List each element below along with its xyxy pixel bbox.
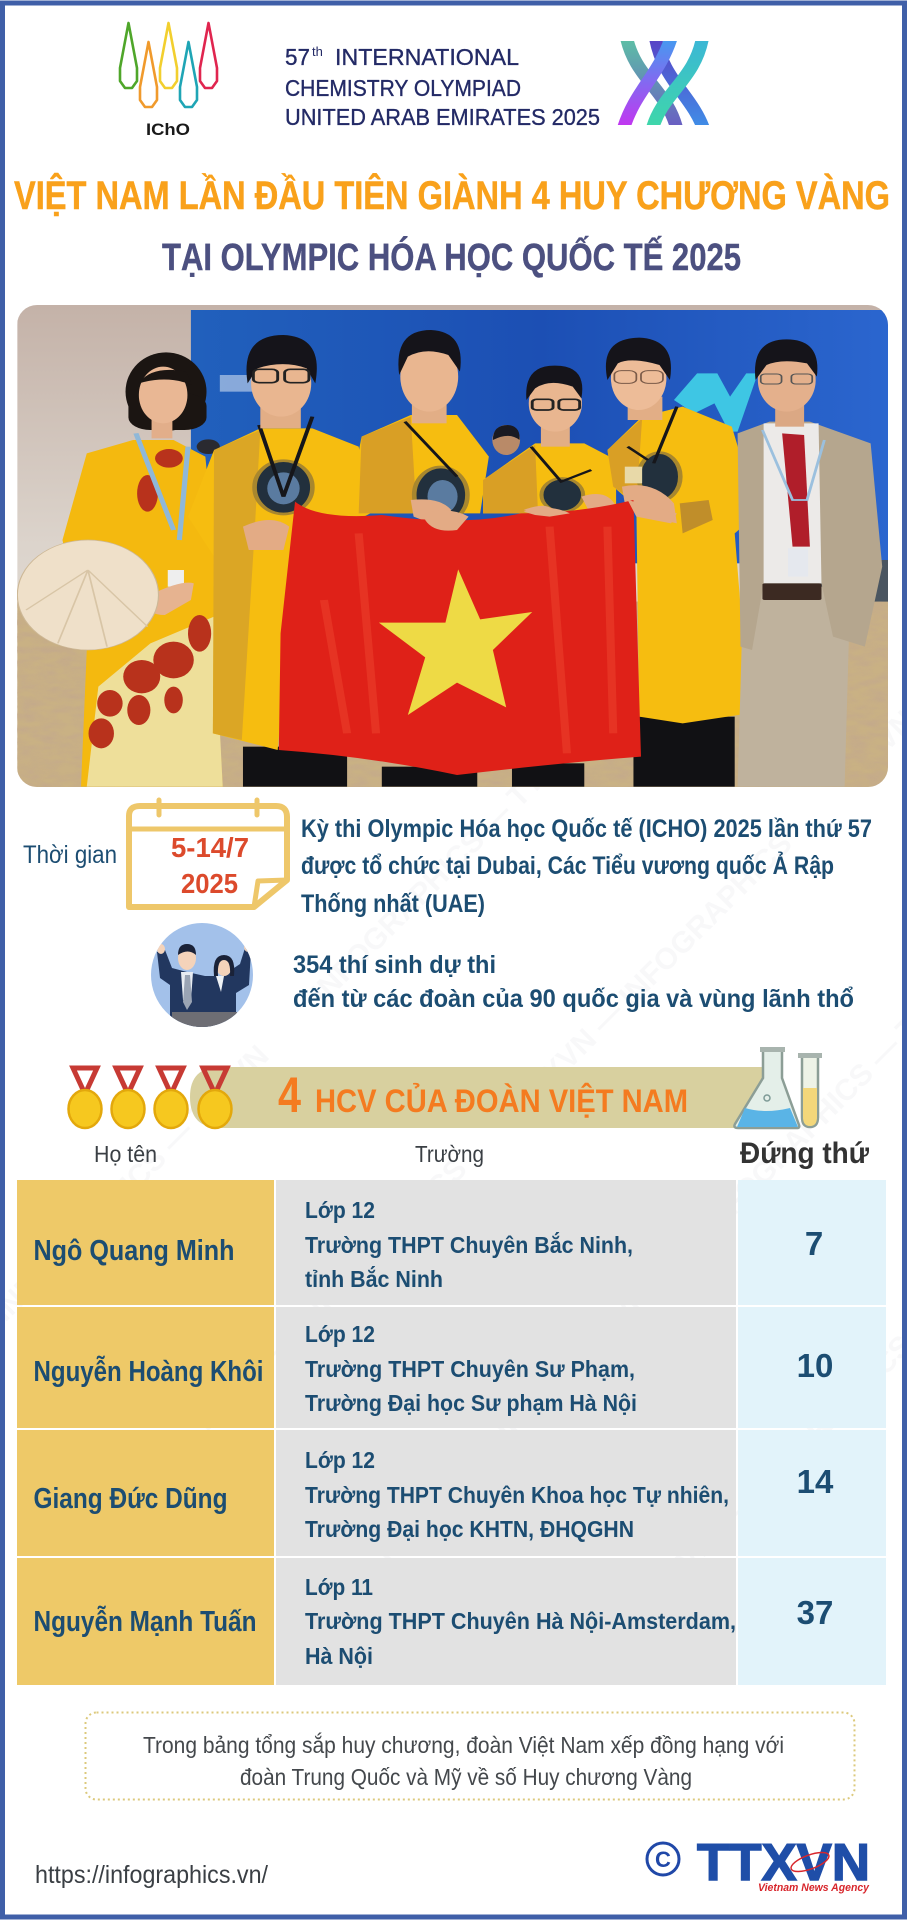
text block: contestant numbers: đến từ các đoàn của 90 quốc gia và vùng lãnh thổ — [293, 985, 854, 1013]
callout: medal table note: đoàn Trung Quốc và Mỹ về số Huy chương Vàng — [240, 1764, 692, 1790]
photo: male teacher in beige suit — [738, 339, 882, 787]
row 1: Ngô Quang Minh: Lớp 12 — [305, 1197, 375, 1223]
row 1: Ngô Quang Minh — [17, 1180, 886, 1305]
watermarks: TTXVN — INFOGRAPHICS — [185, 1152, 474, 1441]
table header — [94, 1137, 869, 1170]
footer url: https://infographics.vn/ — [35, 1861, 268, 1889]
banner: 4 HCV của đoàn Việt Nam — [190, 1067, 775, 1128]
subtitle: TẠI OLYMPIC HÓA HỌC QUỐC TẾ 2025 — [162, 234, 741, 279]
watermarks: INFOGRAPHICS — [630, 498, 816, 684]
row 1: Ngô Quang Minh: tỉnh Bắc Ninh — [305, 1265, 443, 1292]
banner: 4 HCV của đoàn Việt Nam: HCV CỦA ĐOÀN VIỆT NAM — [315, 1083, 688, 1119]
row 3: Giang Đức Dũng: 14 — [797, 1463, 834, 1500]
logo: 57th International Chemistry Olympiad text: CHEMISTRY OLYMPIAD — [285, 75, 521, 101]
callout: medal table note: Trong bảng tổng sắp huy chương, đoàn Việt Nam xếp đồng hạng với — [143, 1732, 784, 1758]
row 2: Nguyễn Hoàng Khôi: Trường THPT Chuyên Sư Phạm, — [305, 1356, 635, 1382]
watermarks: TTXVN — INFOGRAPHICS — [510, 827, 799, 1116]
logo: IChO: IChO — [146, 120, 190, 139]
photo: Vietnamese team with national flag — [17, 305, 891, 788]
logo: IChO — [120, 23, 217, 139]
watermarks — [0, 498, 907, 1794]
row 2: Nguyễn Hoàng Khôi — [17, 1307, 886, 1428]
photo: student 3 — [483, 366, 616, 787]
photo: Vietnamese flag — [279, 500, 677, 775]
row 4: Nguyễn Mạnh Tuấn: Lớp 11 — [305, 1574, 373, 1600]
row 2: Nguyễn Hoàng Khôi: Trường Đại học Sư phạm Hà Nội — [305, 1390, 637, 1416]
row 4: Nguyễn Mạnh Tuấn — [17, 1558, 886, 1685]
row 3: Giang Đức Dũng: Trường Đại học KHTN, ĐHQGHN — [305, 1516, 634, 1542]
photo: student 4 — [606, 338, 742, 787]
row 3: Giang Đức Dũng — [17, 1430, 886, 1556]
row 2: Nguyễn Hoàng Khôi: Lớp 12 — [305, 1321, 375, 1347]
logo: 57th International Chemistry Olympiad text: 57 — [285, 44, 310, 70]
table header: Họ tên — [94, 1141, 157, 1167]
text block: competition info: Thống nhất (UAE) — [301, 890, 485, 918]
photo background — [17, 305, 891, 788]
table header: Đứng thứ — [740, 1137, 869, 1170]
row 2: Nguyễn Hoàng Khôi: 10 — [797, 1347, 833, 1384]
icon: calendar with dates: 2025 — [181, 868, 238, 899]
logo: 57th International Chemistry Olympiad text: UNITED ARAB EMIRATES 2025 — [285, 104, 600, 130]
logo: TTXVN Vietnam News Agency: Vietnam News Agency — [758, 1882, 870, 1894]
icon: calendar with dates — [129, 800, 287, 907]
logo: 57th International Chemistry Olympiad text: th — [312, 44, 323, 59]
logo: TTXVN Vietnam News Agency: TTXVN — [697, 1834, 870, 1892]
table header: Trường — [415, 1141, 484, 1167]
logo: 57th International Chemistry Olympiad text — [285, 44, 600, 130]
row 1: Ngô Quang Minh: Trường THPT Chuyên Bắc Ninh, — [305, 1231, 633, 1258]
banner: 4 HCV của đoàn Việt Nam: 4 — [278, 1067, 301, 1123]
photo: woman in ao dai — [62, 352, 223, 787]
logo: XX strands — [623, 35, 704, 130]
row 4: Nguyễn Mạnh Tuấn: Trường THPT Chuyên Hà Nội-Amsterdam, — [305, 1608, 736, 1634]
photo: student 1 — [206, 335, 370, 787]
text block: contestant numbers: 354 thí sinh dự thi — [293, 951, 496, 979]
watermarks: INFOGRAPHICS — TTXVN — [369, 1280, 657, 1568]
row 1: Ngô Quang Minh: Ngô Quang Minh — [34, 1235, 234, 1267]
icon: four gold medals — [68, 1068, 232, 1128]
text block: contestant numbers — [293, 951, 854, 1013]
row 2: Nguyễn Hoàng Khôi: Nguyễn Hoàng Khôi — [34, 1354, 264, 1388]
icon: two contestants in circle — [151, 923, 253, 1030]
icon: calendar with dates: 5-14/7 — [171, 832, 249, 863]
text block: competition info — [301, 815, 872, 918]
logo: 57th International Chemistry Olympiad text: INTERNATIONAL — [335, 44, 519, 70]
photo: small background people — [197, 425, 520, 455]
photo: student 2 — [347, 330, 489, 787]
row 1: Ngô Quang Minh: 7 — [805, 1225, 823, 1262]
label: Thời gian: Thời gian — [23, 841, 117, 869]
icon: chemistry flask and test tube — [734, 1047, 822, 1128]
watermarks: INFOGRAPHICS — TTXVN — [305, 721, 594, 1009]
logo: TTXVN Vietnam News Agency: C — [655, 1847, 671, 1872]
row 4: Nguyễn Mạnh Tuấn: 37 — [797, 1594, 833, 1631]
row 3: Giang Đức Dũng: Lớp 12 — [305, 1447, 375, 1473]
row 4: Nguyễn Mạnh Tuấn: Nguyễn Mạnh Tuấn — [34, 1604, 256, 1638]
row 4: Nguyễn Mạnh Tuấn: Hà Nội — [305, 1643, 373, 1669]
photo: conical hat — [17, 540, 159, 650]
table: medalists — [17, 1180, 886, 1685]
row 3: Giang Đức Dũng: Trường THPT Chuyên Khoa học Tự nhiên, — [305, 1482, 729, 1508]
callout: medal table note — [86, 1712, 854, 1800]
row 3: Giang Đức Dũng: Giang Đức Dũng — [34, 1483, 228, 1515]
